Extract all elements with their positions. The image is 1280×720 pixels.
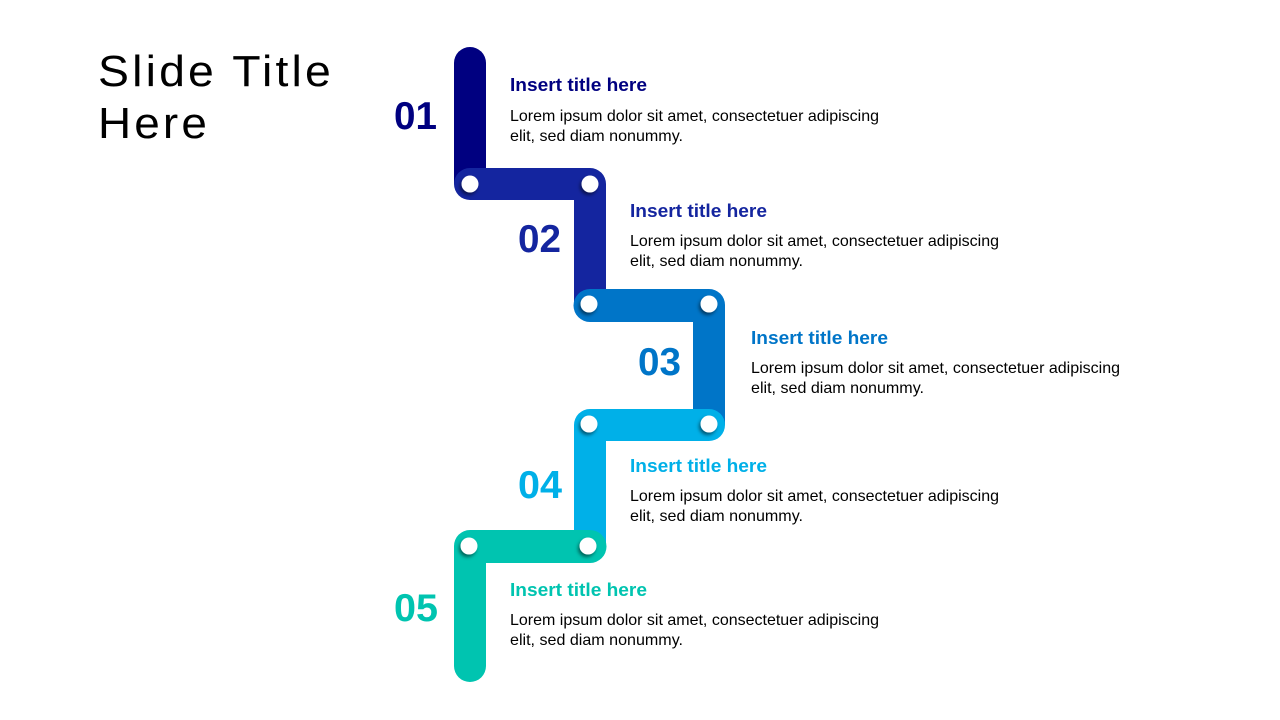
step 01 text: elit, sed diam nonummy.	[510, 128, 683, 145]
connector segment 5	[454, 530, 606, 682]
step 02 text: elit, sed diam nonummy.	[630, 253, 803, 270]
step 05 heading: Insert title here	[510, 580, 647, 600]
title: Here	[98, 99, 210, 148]
step 05	[394, 580, 879, 649]
title	[98, 47, 334, 148]
step 03	[638, 328, 1120, 397]
title: Slide Title	[98, 47, 334, 96]
step 03 text: Lorem ipsum dolor sit amet, consectetuer adipiscing	[751, 360, 1120, 377]
step 03 text	[751, 360, 1120, 397]
step 05 text: elit, sed diam nonummy.	[510, 632, 683, 649]
number 03: 03	[638, 341, 681, 384]
connector segment 1	[454, 47, 486, 184]
step 04 heading: Insert title here	[630, 456, 767, 476]
step 05 text: Lorem ipsum dolor sit amet, consectetuer adipiscing	[510, 612, 879, 629]
step 02	[518, 201, 999, 270]
step 01 text	[510, 108, 879, 145]
number 04: 04	[518, 464, 562, 507]
step 04 text: elit, sed diam nonummy.	[630, 508, 803, 525]
step 05 text	[510, 612, 879, 649]
step 02 text	[630, 233, 999, 270]
step 02 text: Lorem ipsum dolor sit amet, consectetuer adipiscing	[630, 233, 999, 250]
connector nodes	[460, 176, 718, 554]
step 03 text: elit, sed diam nonummy.	[751, 380, 924, 397]
connector segment 3	[574, 289, 725, 425]
step 01 text: Lorem ipsum dolor sit amet, consectetuer adipiscing	[510, 108, 879, 125]
step 04	[518, 456, 999, 525]
step 03 heading: Insert title here	[751, 328, 888, 348]
step 04 text: Lorem ipsum dolor sit amet, consectetuer adipiscing	[630, 488, 999, 505]
step 04 text	[630, 488, 999, 525]
connector segment 4	[574, 409, 725, 546]
step 01 heading: Insert title here	[510, 75, 647, 95]
connector segment 2	[454, 168, 606, 305]
step 02 heading: Insert title here	[630, 201, 767, 221]
number 02: 02	[518, 218, 561, 261]
step 01	[394, 75, 879, 145]
number 01: 01	[394, 95, 437, 138]
number 05: 05	[394, 587, 438, 630]
